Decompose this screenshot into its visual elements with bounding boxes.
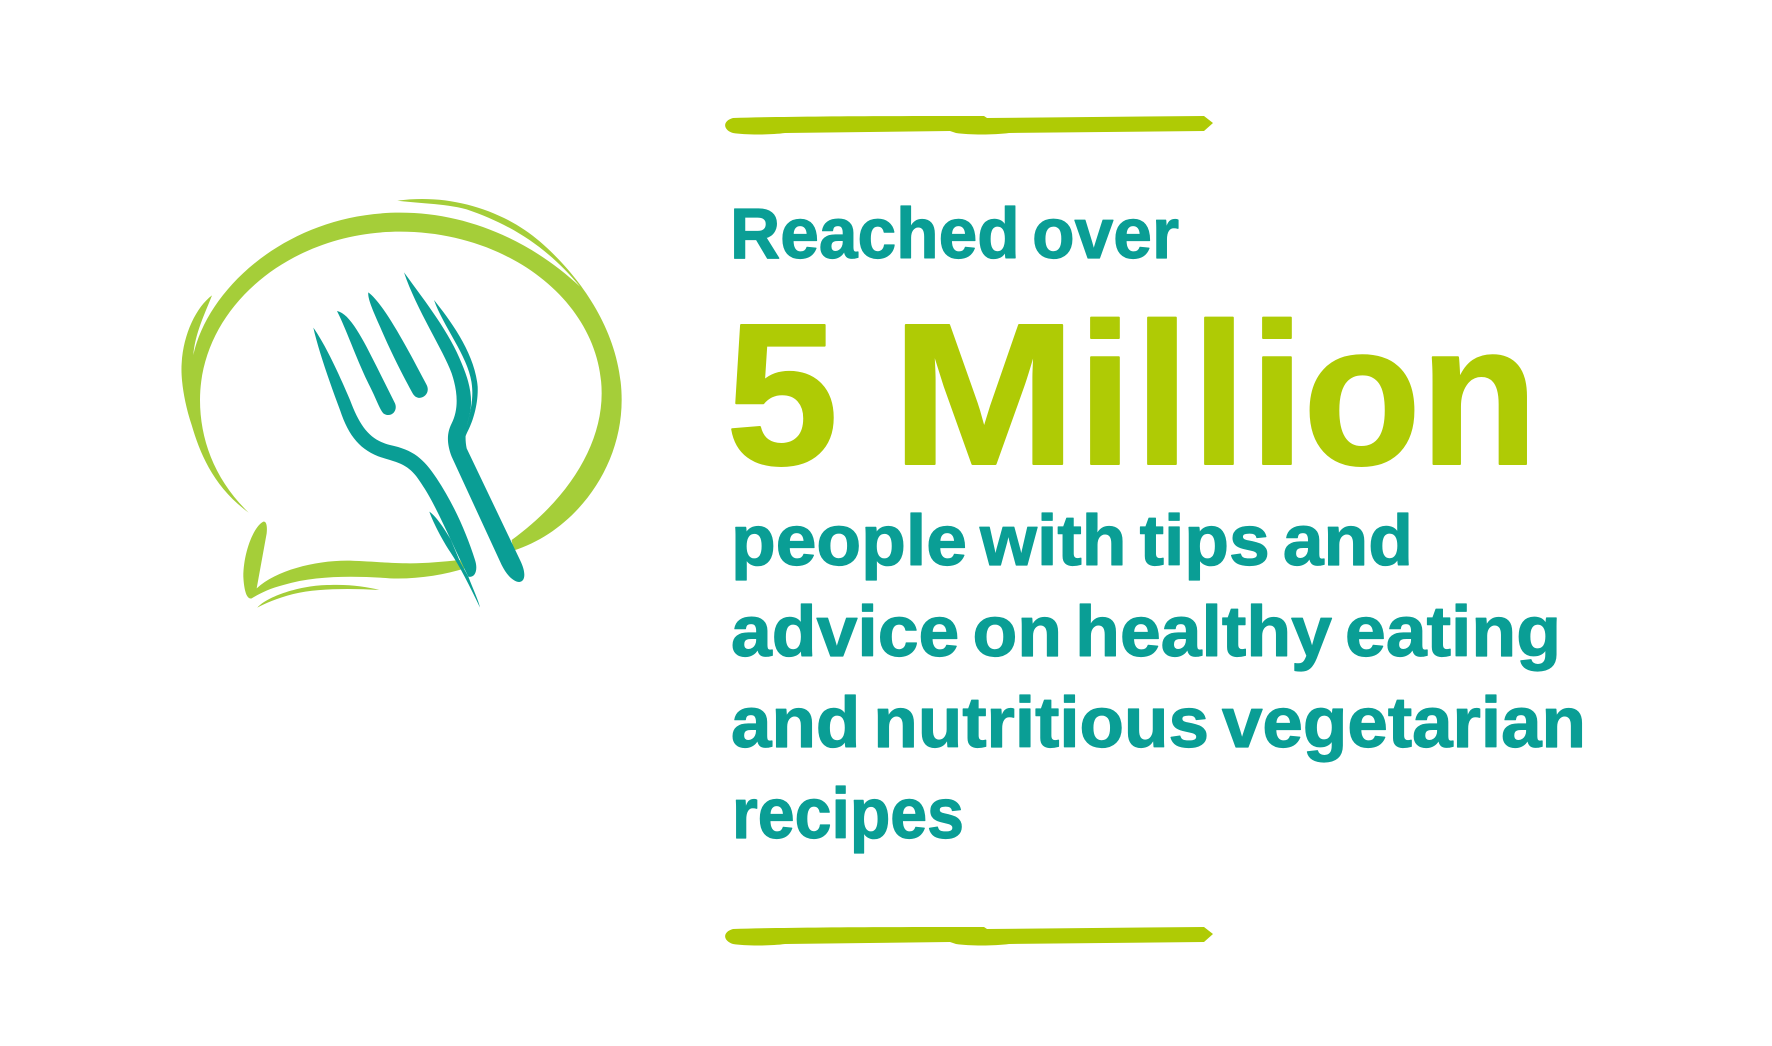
big number: 5 Million: illi bbox=[1077, 281, 1305, 507]
tail accent stroke bbox=[257, 585, 379, 608]
line 3: and nutritious vegetarian bbox=[731, 684, 1586, 763]
big number: 5 Million: M bbox=[891, 281, 1077, 507]
body text bbox=[731, 502, 1586, 854]
big number: 5 Million: o bbox=[1303, 281, 1421, 507]
bottom knife divider bbox=[725, 927, 1213, 946]
big number: 5 Million: 5 bbox=[726, 281, 838, 507]
line 1: people with tips and bbox=[731, 502, 1413, 581]
speech bubble outline bbox=[181, 199, 622, 551]
fork bbox=[313, 272, 524, 608]
big number: 5 Million: n bbox=[1420, 281, 1538, 507]
line 2: advice on healthy eating bbox=[731, 593, 1561, 672]
heading: Reached over: Reached over bbox=[730, 195, 1179, 274]
line 4: recipes bbox=[732, 775, 964, 854]
icon: speech bubble with fork bbox=[181, 199, 622, 608]
speech bubble tail bbox=[243, 522, 465, 599]
top knife divider bbox=[725, 116, 1213, 134]
